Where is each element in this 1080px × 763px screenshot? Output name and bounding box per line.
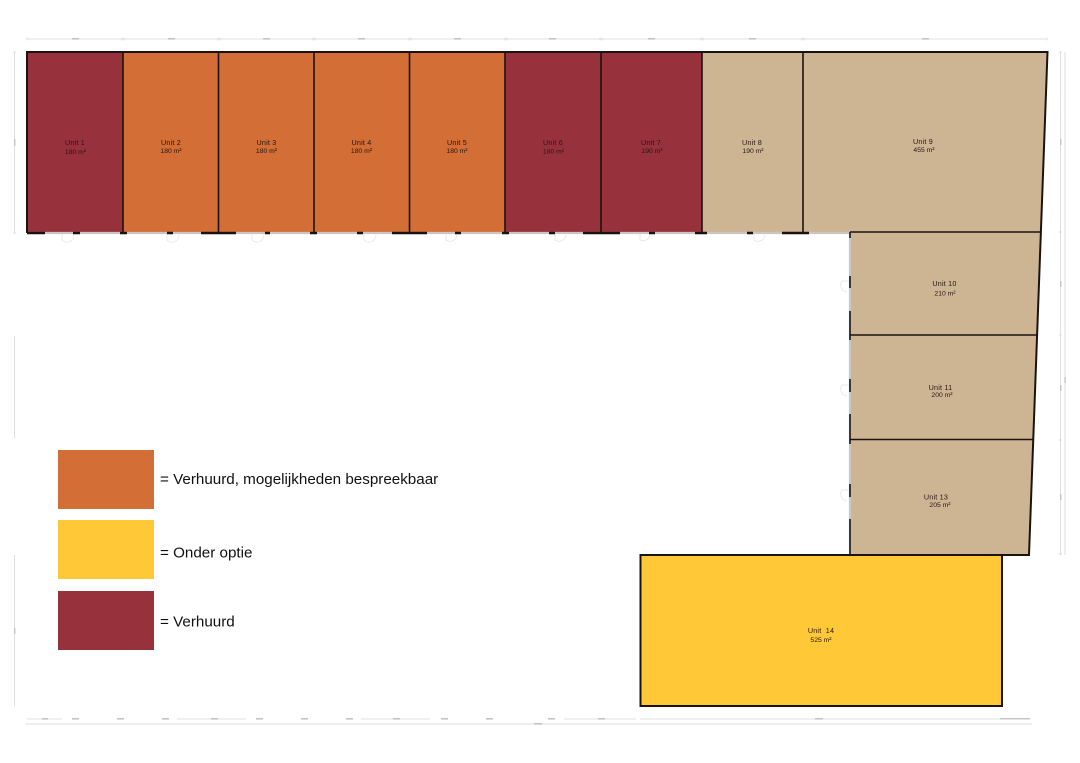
unit 1 (27, 52, 123, 233)
legend item: under option (58, 520, 252, 579)
unit 2 (123, 52, 218, 233)
top dimension line (27, 38, 1047, 40)
unit 14 (640, 555, 1002, 706)
right dimension lines (1059, 52, 1066, 555)
unit 6 (505, 52, 601, 233)
unit 13: Unit 13 (924, 492, 948, 502)
unit 8: 190 m² (742, 148, 764, 155)
legend item: rented, options negotiable (58, 450, 438, 509)
unit 8 (702, 52, 803, 233)
unit 9: Unit 9 (913, 137, 933, 146)
unit 5 (410, 52, 505, 233)
unit 13 (850, 440, 1033, 555)
legend item: rented, options negotiable: = Verhuurd, mogelijkheden bespreekbaar (160, 471, 438, 488)
unit 4: Unit 4 (352, 138, 371, 147)
unit 5: 180 m² (446, 148, 468, 155)
unit 11 (850, 335, 1037, 440)
unit 10: Unit 10 (932, 279, 957, 288)
unit 6: Unit 6 (543, 138, 563, 147)
unit 9 (803, 52, 1048, 233)
unit 11: 200 m² (931, 392, 953, 399)
unit 7 (601, 52, 702, 233)
unit 6: 180 m² (543, 148, 565, 156)
unit 11: Unit 11 (929, 383, 952, 392)
unit 2: Unit 2 (161, 138, 181, 147)
unit 3: 180 m² (256, 148, 278, 155)
unit 3: Unit 3 (257, 138, 276, 147)
unit 8: Unit 8 (742, 138, 762, 147)
bottom dimension lines (26, 718, 1032, 725)
unit 10 (850, 232, 1041, 335)
unit 3 (218, 52, 314, 233)
unit 2: 180 m² (160, 148, 182, 155)
legend (58, 450, 438, 650)
unit 13: 205 m² (929, 502, 951, 509)
unit 14: Unit 14 (808, 626, 834, 635)
unit 7: 190 m² (641, 148, 663, 155)
unit 1: 180 m² (65, 149, 87, 156)
door swings (62, 234, 849, 501)
unit 9: 455 m² (913, 147, 935, 154)
legend item: under option: = Onder optie (160, 544, 252, 562)
unit 5: Unit 5 (447, 138, 467, 147)
unit 14: 525 m² (810, 637, 832, 644)
left dimension lines (13, 52, 16, 706)
legend item: rented (58, 591, 235, 650)
unit 4: 180 m² (351, 148, 373, 155)
unit 1: Unit 1 (65, 138, 85, 147)
unit 4 (314, 52, 410, 233)
legend item: rented: = Verhuurd (160, 614, 235, 630)
unit 10: 210 m² (934, 290, 956, 298)
unit 7: Unit 7 (641, 138, 661, 147)
